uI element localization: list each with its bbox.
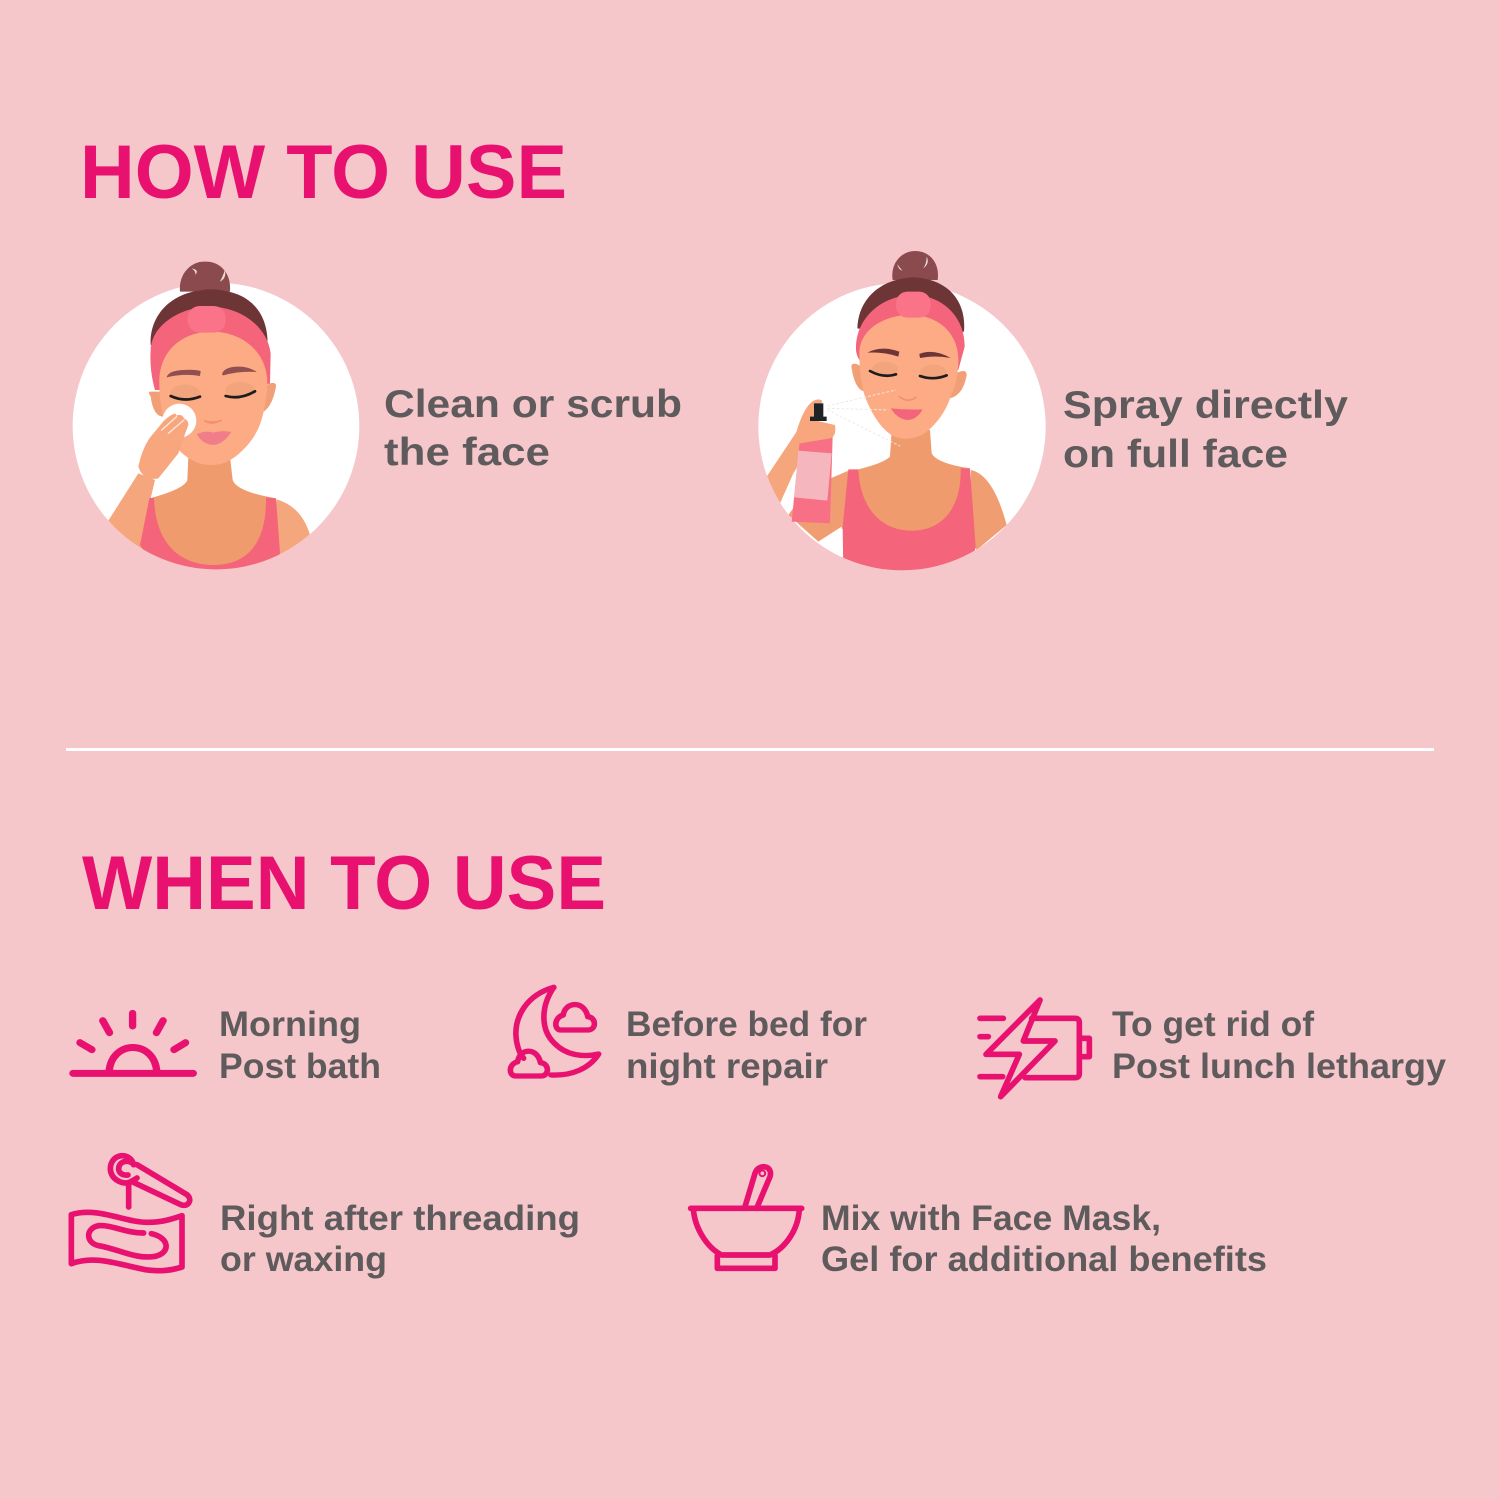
icon: battery with lightning — [980, 1000, 1089, 1097]
text: post lunch — [1112, 1005, 1447, 1086]
step text: clean or scrub: Clean or scrub — [384, 383, 682, 426]
text: threading: Right after threading — [220, 1199, 580, 1238]
icon: sunrise — [73, 1013, 193, 1073]
text: before bed: night repair — [626, 1047, 828, 1086]
text: morning — [219, 1005, 381, 1086]
text: mix with face mask: Gel for additional benefits — [821, 1240, 1267, 1279]
icon: spray bottle — [792, 437, 833, 523]
text: post lunch: Post lunch lethargy — [1112, 1047, 1447, 1086]
text: morning: Post bath — [219, 1047, 381, 1086]
step text: spray directly: on full face — [1063, 433, 1288, 476]
text: mix with face mask — [821, 1199, 1267, 1279]
step text: clean or scrub: the face — [384, 431, 550, 474]
icon: moon and clouds — [510, 987, 599, 1076]
heading: when to use: WHEN TO USE — [82, 841, 606, 926]
heading: how to use: HOW TO USE — [80, 130, 567, 215]
text: before bed: Before bed for — [626, 1005, 867, 1044]
step text: spray directly — [1063, 384, 1348, 476]
text: threading: or waxing — [220, 1240, 387, 1279]
step text: clean or scrub — [384, 383, 682, 474]
text: post lunch: To get rid of — [1112, 1005, 1314, 1044]
text: mix with face mask: Mix with Face Mask, — [821, 1199, 1161, 1238]
text: threading — [220, 1199, 580, 1279]
illustration: woman spraying face mist — [758, 251, 1046, 573]
text: before bed — [626, 1005, 867, 1086]
illustration: woman cleaning face with cotton pad — [73, 262, 359, 575]
step text: spray directly: Spray directly — [1063, 384, 1348, 427]
icon: mixing bowl — [691, 1167, 802, 1268]
text: morning: Morning — [219, 1005, 361, 1044]
icon: wax strip and spatula — [71, 1156, 190, 1271]
